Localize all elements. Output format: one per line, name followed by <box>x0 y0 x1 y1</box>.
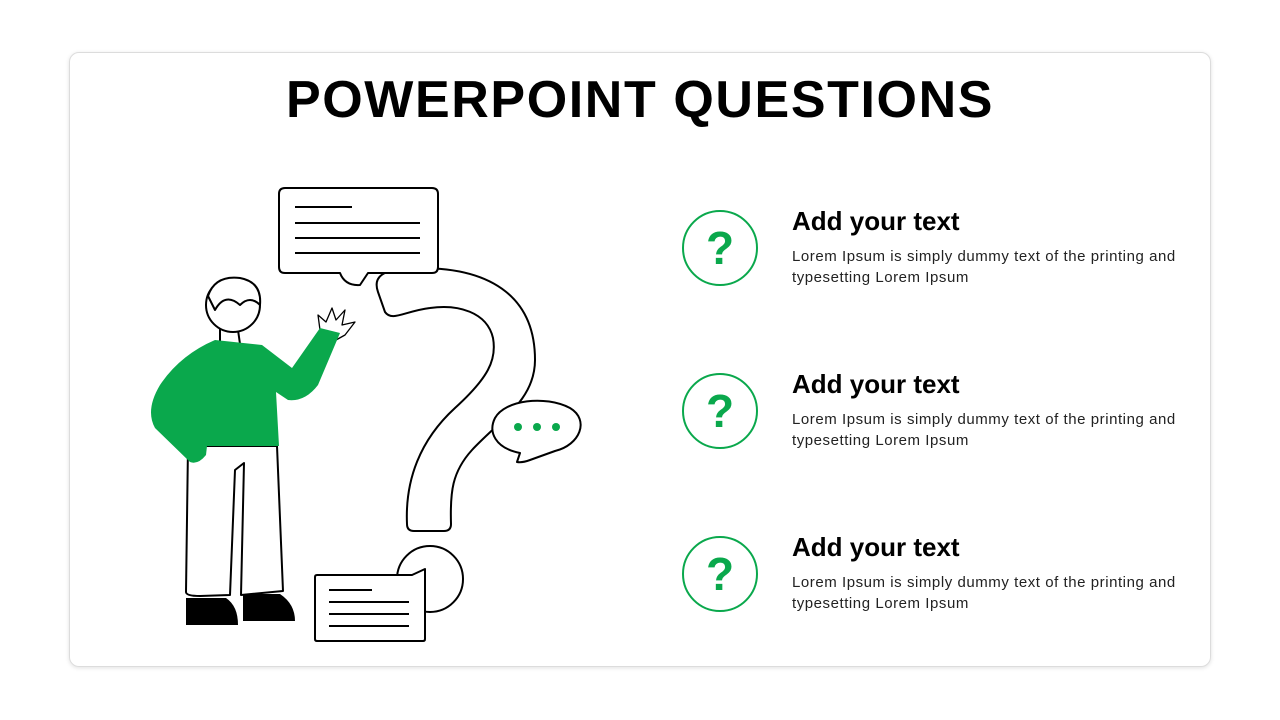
speech bubble top <box>279 188 438 285</box>
item 2 <box>682 369 1176 449</box>
icon: question circle: ? <box>706 548 734 600</box>
item 3 <box>682 532 1176 612</box>
text: Lorem Ipsum is simply dummy text of the printing and typesetting Lorem Ipsum <box>792 411 1176 449</box>
speech bubble dots <box>492 401 581 462</box>
person <box>151 278 355 625</box>
item 1 <box>682 206 1176 286</box>
heading: Add your text <box>792 369 960 399</box>
question mark <box>377 268 535 612</box>
heading: Add your text <box>792 206 960 236</box>
icon: question circle <box>682 210 758 286</box>
text: Lorem Ipsum is simply dummy text of the printing and typesetting Lorem Ipsum <box>792 574 1176 612</box>
speech bubble bottom <box>315 569 425 641</box>
heading: Add your text <box>792 532 960 562</box>
card panel <box>69 52 1211 667</box>
icon: question circle <box>682 536 758 612</box>
icon: question circle: ? <box>706 385 734 437</box>
icon: question circle <box>682 373 758 449</box>
text: Lorem Ipsum is simply dummy text of the printing and typesetting Lorem Ipsum <box>792 248 1176 286</box>
icon: question circle: ? <box>706 222 734 274</box>
title: POWERPOINT QUESTIONS <box>286 71 994 129</box>
